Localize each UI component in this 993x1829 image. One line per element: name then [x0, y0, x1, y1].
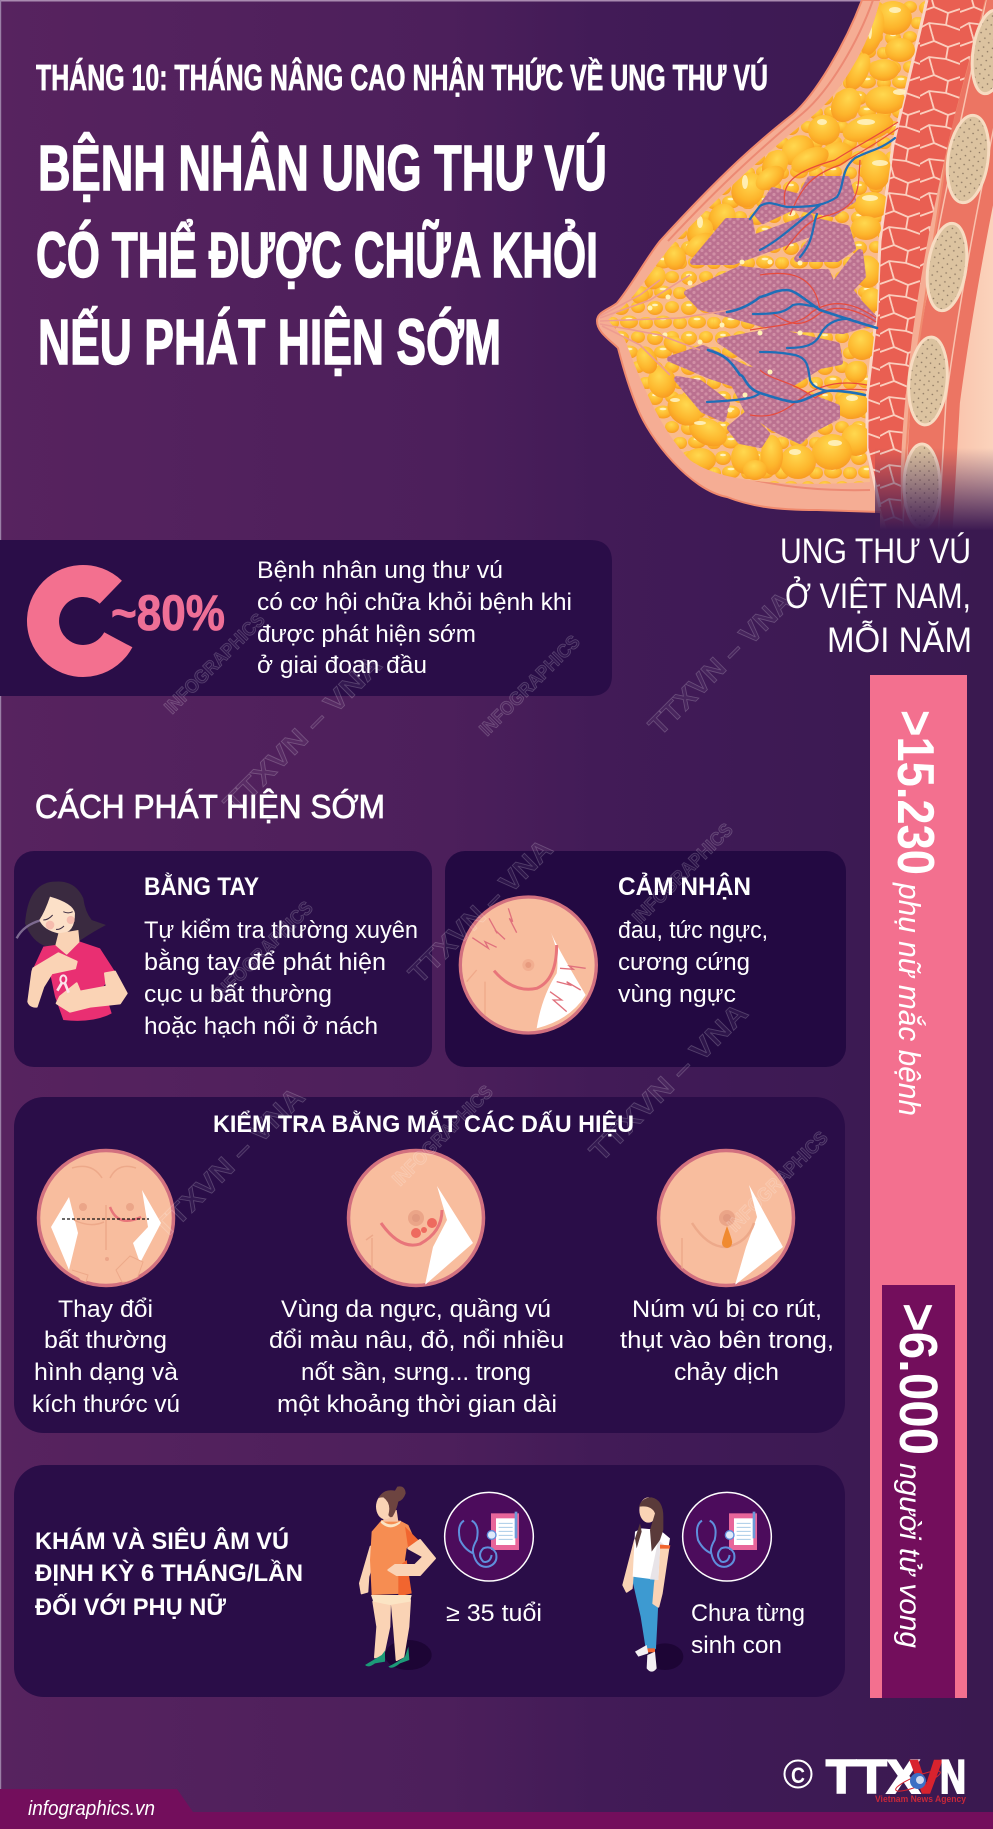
text: cure chance description: được phát hiện sớm: [257, 621, 476, 648]
text: feeling description: đau, tức ngực,: [618, 917, 768, 944]
icon: stethoscope and clipboard: [445, 1492, 533, 1581]
text: skin changes: một khoảng thời gian dài: [277, 1391, 557, 1418]
label: never given birth: [691, 1600, 805, 1659]
watermarks: TTXVN – VNA: [402, 833, 559, 989]
text: nipple changes: Núm vú bị co rút,: [632, 1296, 822, 1323]
text: screening recommendation: KHÁM VÀ SIÊU ÂM VÚ: [35, 1527, 289, 1555]
text: by hand description: [144, 917, 418, 1040]
text: feeling description: vùng ngực: [618, 981, 736, 1008]
illustration: woman in orange dress: [360, 1486, 435, 1670]
watermarks: TTXVN – VNA: [147, 1081, 311, 1244]
logo: TTXVN: [784, 1750, 966, 1804]
text: skin changes: Vùng da ngực, quầng vú: [281, 1296, 551, 1323]
label: never given birth: Chưa từng: [691, 1600, 805, 1627]
bar: new cases: [870, 675, 967, 1698]
label: deaths: người tử vong: [893, 1463, 926, 1648]
bar: deaths: [882, 1285, 955, 1698]
heading: early detection: CÁCH PHÁT HIỆN SỚM: [35, 788, 385, 825]
ribs: [904, 8, 993, 528]
stat: about 80 percent: ~80%: [111, 585, 225, 641]
main title: NẾU PHÁT HIỆN SỚM: [38, 305, 501, 378]
text: shape change: bất thường: [44, 1327, 167, 1354]
vessels: [750, 122, 898, 416]
watermarks: INFOGRAPHICS: [389, 1082, 498, 1191]
icon: woman checking breast: [17, 882, 127, 1021]
text: by hand description: bằng tay để phát hiện: [144, 949, 386, 976]
panel: 80 percent cure chance: [0, 540, 612, 696]
text: screening recommendation: ĐỊNH KỲ 6 THÁNG/LẦN: [35, 1559, 303, 1587]
stat: 6000 deaths: >6.000: [888, 1303, 948, 1455]
text: by hand description: Tự kiểm tra thường xuyên: [144, 917, 418, 944]
heading: Vietnam stats: [780, 532, 972, 660]
label: by hand: BẰNG TAY: [144, 872, 259, 901]
watermarks: TTXVN – VNA: [217, 649, 388, 819]
watermarks: INFOGRAPHICS: [724, 1128, 833, 1237]
icon: shape change: [38, 1150, 174, 1286]
text: nipple changes: thụt vào bên trong,: [620, 1327, 834, 1354]
icon: stethoscope and clipboard: [683, 1492, 771, 1581]
watermarks: INFOGRAPHICS: [161, 610, 270, 719]
heading: visual checks: KIỂM TRA BẰNG MẮT CÁC DẤU HIỆU: [213, 1110, 634, 1138]
text: cure chance description: ở giai đoạn đầu: [257, 652, 427, 679]
icon: nipple discharge: [658, 1150, 794, 1286]
text: skin changes: [269, 1296, 564, 1418]
text: skin changes: đổi màu nâu, đỏ, nổi nhiều: [269, 1327, 564, 1354]
watermarks: INFOGRAPHICS: [476, 632, 585, 741]
logo: TTXVN: TTX: [826, 1750, 920, 1803]
stat: 15230 women: >15.230: [886, 710, 944, 875]
watermarks: TTXVN – VNA: [642, 585, 799, 741]
icon: skin spots: [348, 1150, 484, 1286]
label: women affected: phụ nữ mắc bệnh: [892, 882, 927, 1116]
text: nipple changes: chảy dịch: [674, 1359, 779, 1386]
main title: CÓ THỂ ĐƯỢC CHỮA KHỎI: [36, 218, 598, 291]
text: nipple changes: [620, 1296, 834, 1386]
watermarks: INFOGRAPHICS: [209, 898, 318, 1007]
text: cure chance description: có cơ hội chữa khỏi bệnh khi: [257, 589, 572, 616]
text: shape change: kích thước vú: [32, 1391, 180, 1418]
footer: website: infographics.vn: [28, 1798, 155, 1820]
glands: [670, 179, 877, 445]
watermarks: INFOGRAPHICS: [629, 820, 738, 929]
main title: [36, 131, 607, 378]
logo: TTXVN: Vietnam News Agency: [875, 1794, 966, 1804]
text: shape change: hình dạng và: [34, 1359, 179, 1386]
illustration: breast anatomy cross-section: [597, 0, 993, 540]
text: by hand description: hoặc hạch nổi ở nách: [144, 1013, 378, 1040]
panel: visual checks: [14, 1097, 845, 1433]
text: by hand description: cục u bất thường: [144, 981, 332, 1008]
icon: breast pain: [460, 897, 596, 1033]
footer strip: [0, 1789, 993, 1829]
panel: feeling: [445, 851, 846, 1067]
heading: Vietnam stats: Ở VIỆT NAM,: [785, 576, 971, 616]
text: cure chance description: Bệnh nhân ung thư vú: [257, 557, 503, 584]
text: cure chance description: [257, 557, 572, 679]
text: feeling description: [618, 917, 768, 1008]
logo: TTXVN: C: [791, 1763, 805, 1788]
nipple ducts: [600, 275, 730, 375]
logo: TTXVN: N: [940, 1750, 966, 1803]
label: feeling: CẢM NHẬN: [618, 871, 751, 901]
text: skin changes: nốt sần, sưng... trong: [301, 1359, 531, 1386]
label: age 35 and over: ≥ 35 tuổi: [446, 1600, 542, 1627]
chart: 80 percent donut: [27, 565, 132, 677]
panel: regular screening: [14, 1465, 845, 1697]
main title: BỆNH NHÂN UNG THƯ VÚ: [38, 131, 607, 204]
logo: TTXVN: V: [910, 1750, 943, 1803]
heading: Vietnam stats: MỖI NĂM: [827, 620, 972, 660]
text: shape change: Thay đổi: [58, 1296, 153, 1323]
panel: by hand: [14, 851, 432, 1067]
text: shape change: [32, 1296, 180, 1418]
text: screening recommendation: [35, 1527, 303, 1621]
text: screening recommendation: ĐỐI VỚI PHỤ NỮ: [35, 1593, 226, 1621]
watermarks: [147, 585, 833, 1244]
text: feeling description: cương cứng: [618, 949, 750, 976]
illustration: young woman in jeans: [623, 1497, 683, 1672]
watermarks: TTXVN – VNA: [583, 997, 754, 1167]
label: never given birth: sinh con: [691, 1632, 782, 1659]
